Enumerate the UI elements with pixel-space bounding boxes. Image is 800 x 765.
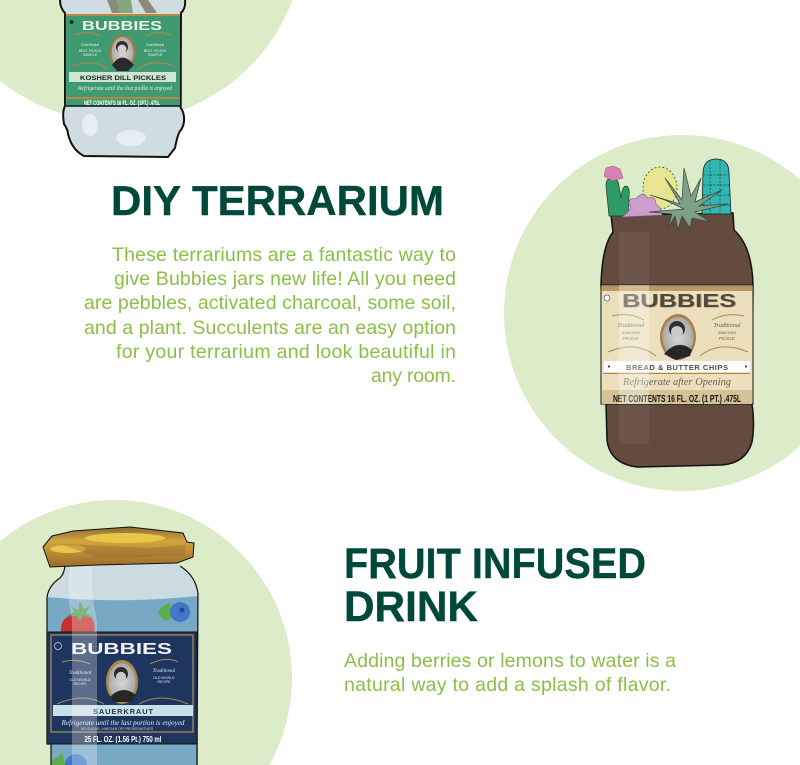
illustration: fruit infused water jar: Traditional: [153, 669, 176, 674]
illustration: fruit infused water jar: 25 FL. OZ. (1.56 Pt.) 750 ml: [84, 735, 162, 744]
illustration: fruit infused water jar: Refrigerate until the last portion is enjoyed: [60, 719, 185, 727]
text block: terrarium description: give Bubbies jars new life! All you need: [114, 268, 456, 290]
illustration: terrarium jar with succulents: Refrigerate after Opening: [622, 377, 731, 388]
text block: terrarium description: any room.: [371, 365, 456, 387]
text block: terrarium description: for your terrarium and look beautiful in: [116, 341, 456, 363]
illustration: terrarium jar with succulents: NET CONTENTS 16 FL. OZ. (1 PT.) .475L: [613, 394, 741, 405]
illustration: fruit infused water jar: SAUERKRAUT: [93, 707, 153, 716]
illustration: pickle jar with green label: [60, 0, 185, 157]
jar label: [65, 14, 180, 106]
blueberry lower: [52, 753, 87, 765]
illustration: terrarium jar with succulents: Traditional: [713, 323, 741, 329]
cacti and succulents: [604, 159, 731, 230]
text block: terrarium description: These terrariums are a fantastic way to: [112, 244, 456, 266]
heading: Fruit Infused Drink: FRUIT INFUSED: [344, 540, 646, 588]
illustration: pickle jar with green label: Gold Medal: [81, 43, 99, 47]
heading: DIY Terrarium: DIY TERRARIUM: [111, 177, 444, 224]
illustration: fruit infused water jar: BUBBIES: [71, 641, 172, 658]
text block: fruit infused description: [344, 650, 676, 696]
illustration: fruit infused water jar: NO SUGAR, VINEGAR OR PRESERVATIVES: [81, 727, 154, 731]
glass highlight: [68, 566, 97, 765]
illustration: terrarium jar with succulents: SNACKING: [622, 331, 640, 335]
illustration: terrarium jar with succulents: PICKLE: [719, 336, 735, 341]
plant stems: [107, 0, 157, 13]
illustration: pickle jar with green label: BUBBIES: [82, 19, 162, 33]
illustration: terrarium jar with succulents: Traditional: [617, 323, 645, 329]
illustration: fruit infused water jar: OLD WORLD: [153, 676, 175, 680]
glass highlight: [619, 232, 649, 444]
text block: terrarium description: and a plant. Succulents are an easy option: [84, 317, 456, 339]
illustration: pickle jar with green label: NET CONTENTS 16 FL. OZ. (1PT.) .475L: [84, 100, 160, 107]
illustration: pickle jar with green label: Gold Medal: [146, 43, 164, 47]
illustration: fruit infused water jar: [43, 527, 198, 765]
illustration: pickle jar with green label: BEST PICKLE: [144, 49, 167, 53]
text block: terrarium description: [84, 244, 456, 387]
jar label: [601, 285, 753, 404]
heading: Fruit Infused Drink: [344, 540, 646, 631]
jar glass: [47, 560, 198, 765]
illustration: fruit infused water jar: OLD WORLD: [69, 678, 91, 682]
illustration: fruit infused water jar: Traditional: [69, 671, 92, 676]
text block: fruit infused description: natural way to add a splash of flavor.: [344, 674, 671, 696]
background circle: right: [504, 135, 800, 491]
blueberry: [158, 602, 190, 622]
illustration: terrarium jar with succulents: PICKLE: [623, 336, 639, 341]
water: [47, 596, 198, 765]
illustration: fruit infused water jar: RECIPE: [157, 680, 171, 684]
jar lid: [43, 527, 194, 567]
illustration: fruit infused water jar: RECIPE: [73, 682, 87, 686]
text block: fruit infused description: Adding berries or lemons to water is a: [344, 650, 676, 672]
illustration: terrarium jar with succulents: BUBBIES: [622, 291, 736, 311]
jar label: [47, 632, 197, 744]
strawberry: [61, 601, 94, 632]
illustration: pickle jar with green label: SAMPLE: [83, 53, 98, 57]
illustration: pickle jar with green label: BEST PICKLE: [79, 49, 102, 53]
illustration: terrarium jar with succulents: SNACKING: [718, 331, 736, 335]
text block: terrarium description: are pebbles, activated charcoal, some soil,: [84, 292, 456, 314]
background circle: top left: [0, 0, 292, 122]
illustration: terrarium jar with succulents: BUBBIES: [623, 292, 737, 312]
illustration: terrarium jar with succulents: BREAD & BUTTER CHIPS: [626, 363, 728, 372]
background circle: bottom left: [0, 500, 292, 765]
jar body: [601, 213, 754, 467]
illustration: terrarium jar with succulents: [601, 159, 754, 467]
illustration: pickle jar with green label: Refrigerate until the last pickle is enjoyed: [77, 85, 173, 92]
illustration: pickle jar with green label: KOSHER DILL PICKLES: [80, 75, 167, 82]
illustration: pickle jar with green label: SAMPLE: [148, 53, 163, 57]
heading: Fruit Infused Drink: DRINK: [344, 583, 478, 631]
